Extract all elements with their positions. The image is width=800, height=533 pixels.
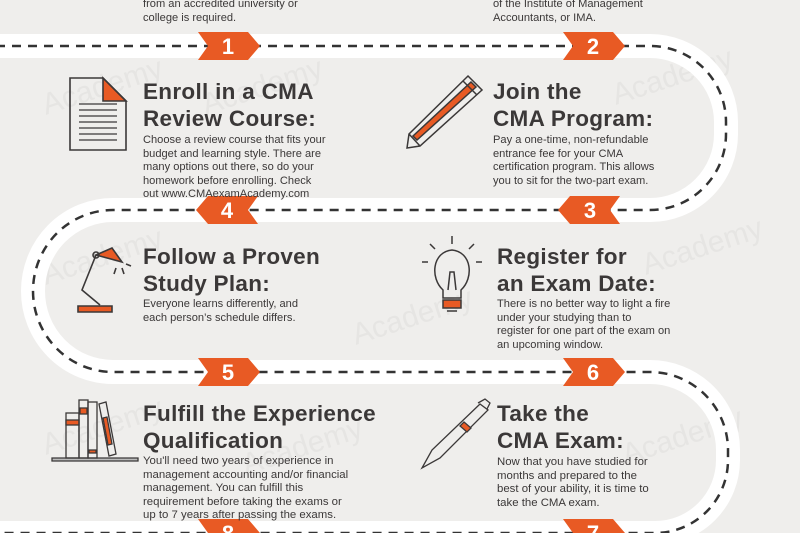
top text right: Accountants, or IMA. bbox=[493, 12, 596, 24]
number badges: 5 bbox=[222, 360, 234, 385]
step: register: Register for bbox=[497, 244, 627, 269]
step: take exam: CMA Exam: bbox=[497, 428, 624, 453]
step: follow: Study Plan: bbox=[143, 271, 270, 296]
top text right bbox=[493, 0, 643, 24]
text: take the CMA exam. bbox=[497, 496, 600, 508]
text: management accounting and/or financial bbox=[143, 468, 348, 480]
step: fulfill: Fulfill the Experience bbox=[143, 401, 376, 426]
watermarks: Academy bbox=[238, 412, 367, 482]
watermarks: Academy bbox=[38, 52, 167, 122]
number badges: 4 bbox=[221, 198, 234, 223]
watermarks: Academy bbox=[608, 42, 737, 112]
text: up to 7 years after passing the exams. bbox=[143, 509, 336, 521]
top text left: college is required. bbox=[143, 12, 236, 24]
number badges: 6 bbox=[587, 360, 599, 385]
watermarks: Academy bbox=[348, 282, 477, 352]
text: months and prepared to the bbox=[497, 470, 637, 482]
text: you to sit for the two-part exam. bbox=[493, 174, 648, 186]
step: follow bbox=[143, 244, 320, 296]
step: take exam: Take the bbox=[497, 401, 589, 426]
text: each person’s schedule differs. bbox=[143, 312, 296, 324]
text: You'll need two years of experience in bbox=[143, 455, 333, 467]
text: There is no better way to light a fire bbox=[497, 298, 670, 310]
step: fulfill bbox=[143, 401, 376, 453]
text: out www.CMAexamAcademy.com bbox=[143, 188, 309, 200]
text: best of your ability, it is time to bbox=[497, 483, 649, 495]
text: management. You can fulfill this bbox=[143, 482, 303, 494]
watermarks: Academy bbox=[38, 392, 167, 462]
text: certification program. This allows bbox=[493, 161, 654, 173]
number badges: 2 bbox=[587, 34, 599, 59]
watermarks: Academy bbox=[638, 212, 767, 282]
text: Now that you have studied for bbox=[497, 456, 648, 468]
text: budget and learning style. There are bbox=[143, 148, 321, 160]
text: register for one part of the exam on bbox=[497, 325, 670, 337]
step: enroll: Review Course: bbox=[143, 106, 316, 131]
text: an upcoming window. bbox=[497, 338, 603, 350]
step: join: Join the bbox=[493, 79, 582, 104]
text: entrance fee for your CMA bbox=[493, 148, 623, 160]
watermarks: Academy bbox=[198, 52, 327, 122]
step: register bbox=[497, 244, 656, 296]
text: requirement before taking the exams or bbox=[143, 496, 342, 508]
text: homework before enrolling. Check bbox=[143, 174, 311, 186]
text: Everyone learns differently, and bbox=[143, 298, 298, 310]
text: under your studying than to bbox=[497, 312, 631, 324]
step: join: CMA Program: bbox=[493, 106, 653, 131]
number badges: 3 bbox=[584, 198, 596, 223]
number badges: 1 bbox=[222, 34, 234, 59]
step: enroll: Enroll in a CMA bbox=[143, 79, 314, 104]
step: take exam bbox=[497, 401, 624, 453]
text: Pay a one-time, non-refundable bbox=[493, 134, 648, 146]
watermarks: Academy bbox=[38, 222, 167, 292]
step: follow: Follow a Proven bbox=[143, 244, 320, 269]
watermarks: Academy bbox=[618, 402, 747, 472]
step: enroll bbox=[143, 79, 316, 131]
text: many options out there, so do your bbox=[143, 161, 314, 173]
top text left bbox=[143, 0, 298, 24]
step: register: an Exam Date: bbox=[497, 271, 656, 296]
step: fulfill: Qualification bbox=[143, 428, 283, 453]
step: join bbox=[493, 79, 653, 131]
text: Choose a review course that fits your bbox=[143, 134, 326, 146]
